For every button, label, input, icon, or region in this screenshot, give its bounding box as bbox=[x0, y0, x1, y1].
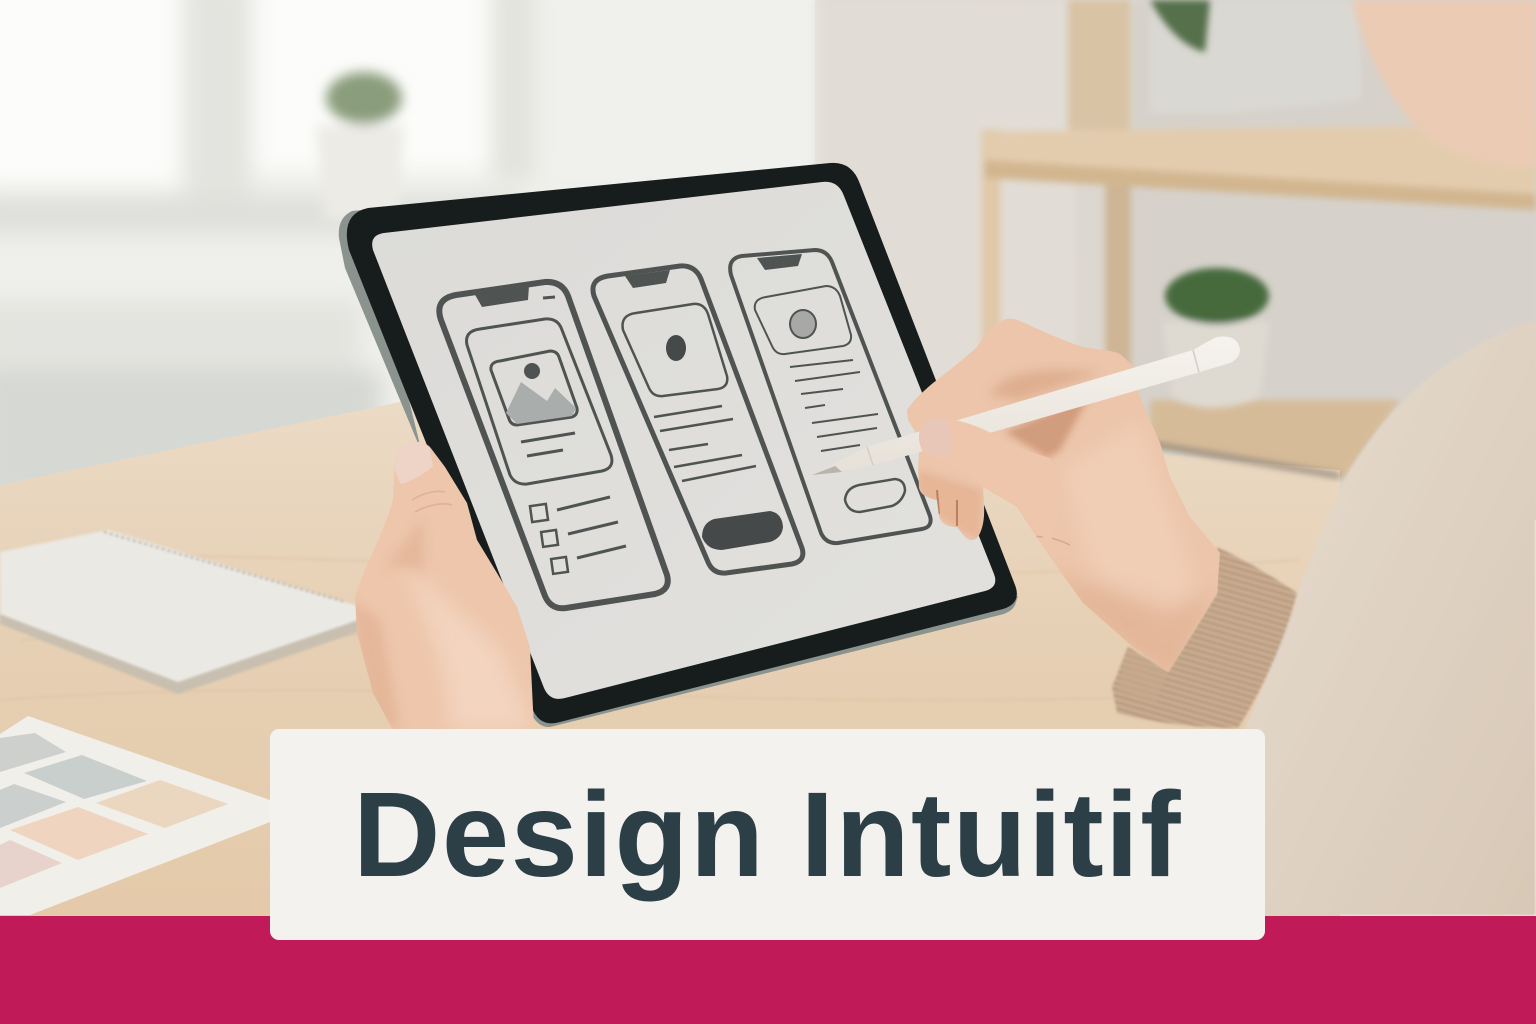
thumbnail bbox=[395, 442, 433, 484]
tablet side rim bbox=[339, 210, 1018, 727]
colour swatch sheet bbox=[0, 716, 270, 915]
right hand holding stylus bbox=[907, 319, 1220, 680]
left hand holding the tablet bbox=[350, 442, 534, 730]
wireframe phone 3 bbox=[730, 250, 931, 543]
person's sweater and shoulder bbox=[1245, 320, 1536, 916]
wireframe phone 2 bbox=[593, 266, 803, 573]
background: room wall and window bbox=[0, 0, 1536, 520]
thumbnail bbox=[919, 418, 952, 458]
tablet screen bbox=[372, 182, 995, 699]
wooden desk bbox=[0, 402, 1340, 916]
crimson bottom band bbox=[0, 916, 1536, 1024]
background: green leaves and small plant on the shelf bbox=[1150, 0, 1270, 408]
background: potted plant on the window sill bbox=[315, 72, 405, 220]
tablet bbox=[339, 163, 1018, 727]
stylus pen bbox=[812, 337, 1240, 475]
tablet body bbox=[347, 163, 1017, 723]
person's chin at top right bbox=[1352, 0, 1536, 166]
title card bbox=[270, 729, 1265, 940]
thumb pressing the stylus bbox=[919, 418, 1065, 545]
notebook on the desk bbox=[0, 530, 358, 694]
sweater cuff bbox=[1112, 547, 1297, 728]
background: wooden shelf unit bbox=[982, 0, 1536, 478]
wireframe phone 1 bbox=[439, 282, 668, 608]
title: Design Intuitif bbox=[353, 766, 1182, 902]
